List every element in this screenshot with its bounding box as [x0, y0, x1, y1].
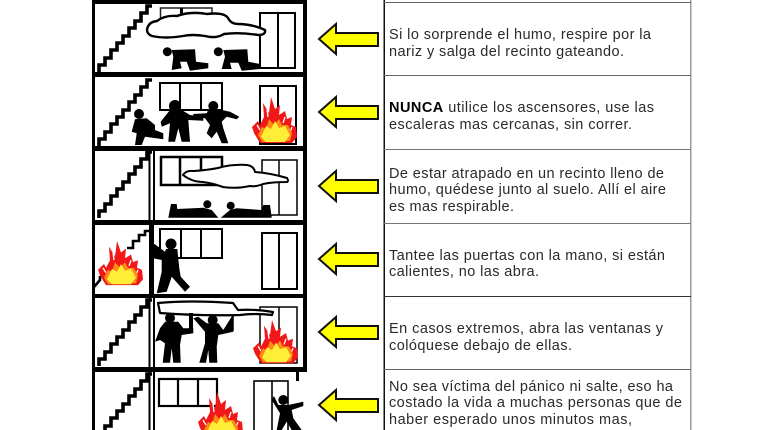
instruction 1 text	[389, 27, 652, 60]
instruction table	[384, 0, 692, 430]
floor 1: smoke and crawling people	[99, 6, 295, 72]
arrow 1	[319, 24, 378, 54]
instruction 3 text: De estar atrapado en un recinto lleno de	[389, 166, 664, 182]
arrow 3	[319, 171, 378, 201]
instruction 1 text: nariz y salga del recinto gateando.	[389, 44, 624, 60]
arrow 6	[319, 390, 378, 420]
instruction 1 text: Si lo sorprende el humo, respire por la	[389, 27, 652, 43]
floor 5: people at open window and fire	[99, 300, 298, 366]
floor 4: fire on stairs and person testing door	[94, 229, 297, 293]
arrow 2	[319, 97, 378, 127]
floor 2: people heading to stairs and fire	[99, 80, 297, 146]
instruction 3 text	[389, 166, 666, 215]
instruction 3 text: humo, quédese junto al suelo. Allí el aire	[389, 182, 666, 198]
building illustration	[92, 0, 307, 430]
instruction 6 text: No sea víctima del pánico ni salte, eso ha	[389, 379, 674, 395]
arrow 4	[319, 244, 378, 274]
instruction 4 text: calientes, no las abra.	[389, 264, 539, 280]
floor 6: fire and person at exit	[99, 374, 303, 430]
instruction 6 text	[389, 379, 682, 428]
instruction 5 text: En casos extremos, abra las ventanas y	[389, 321, 664, 337]
instruction 6 text: haber esperado unos minutos mas,	[389, 412, 632, 428]
instruction 2 text: escaleras mas cercanas, sin correr.	[389, 117, 632, 133]
arrow 5	[319, 317, 378, 347]
instruction 2 text	[389, 100, 654, 133]
floor 3: smoke and people lying on floor	[99, 152, 297, 218]
instruction 5 text: colóquese debajo de ellas.	[389, 338, 572, 354]
instruction 3 text: es mas respirable.	[389, 199, 514, 215]
instruction 5 text	[389, 321, 664, 354]
building frame	[92, 0, 307, 430]
instruction 4 text: Tantee las puertas con la mano, si están	[389, 248, 665, 264]
instruction 4 text	[389, 248, 665, 280]
instruction 2 text: NUNCA utilice los ascensores, use las	[389, 100, 654, 116]
instruction 6 text: costado la vida a muchas personas que de	[389, 395, 682, 411]
